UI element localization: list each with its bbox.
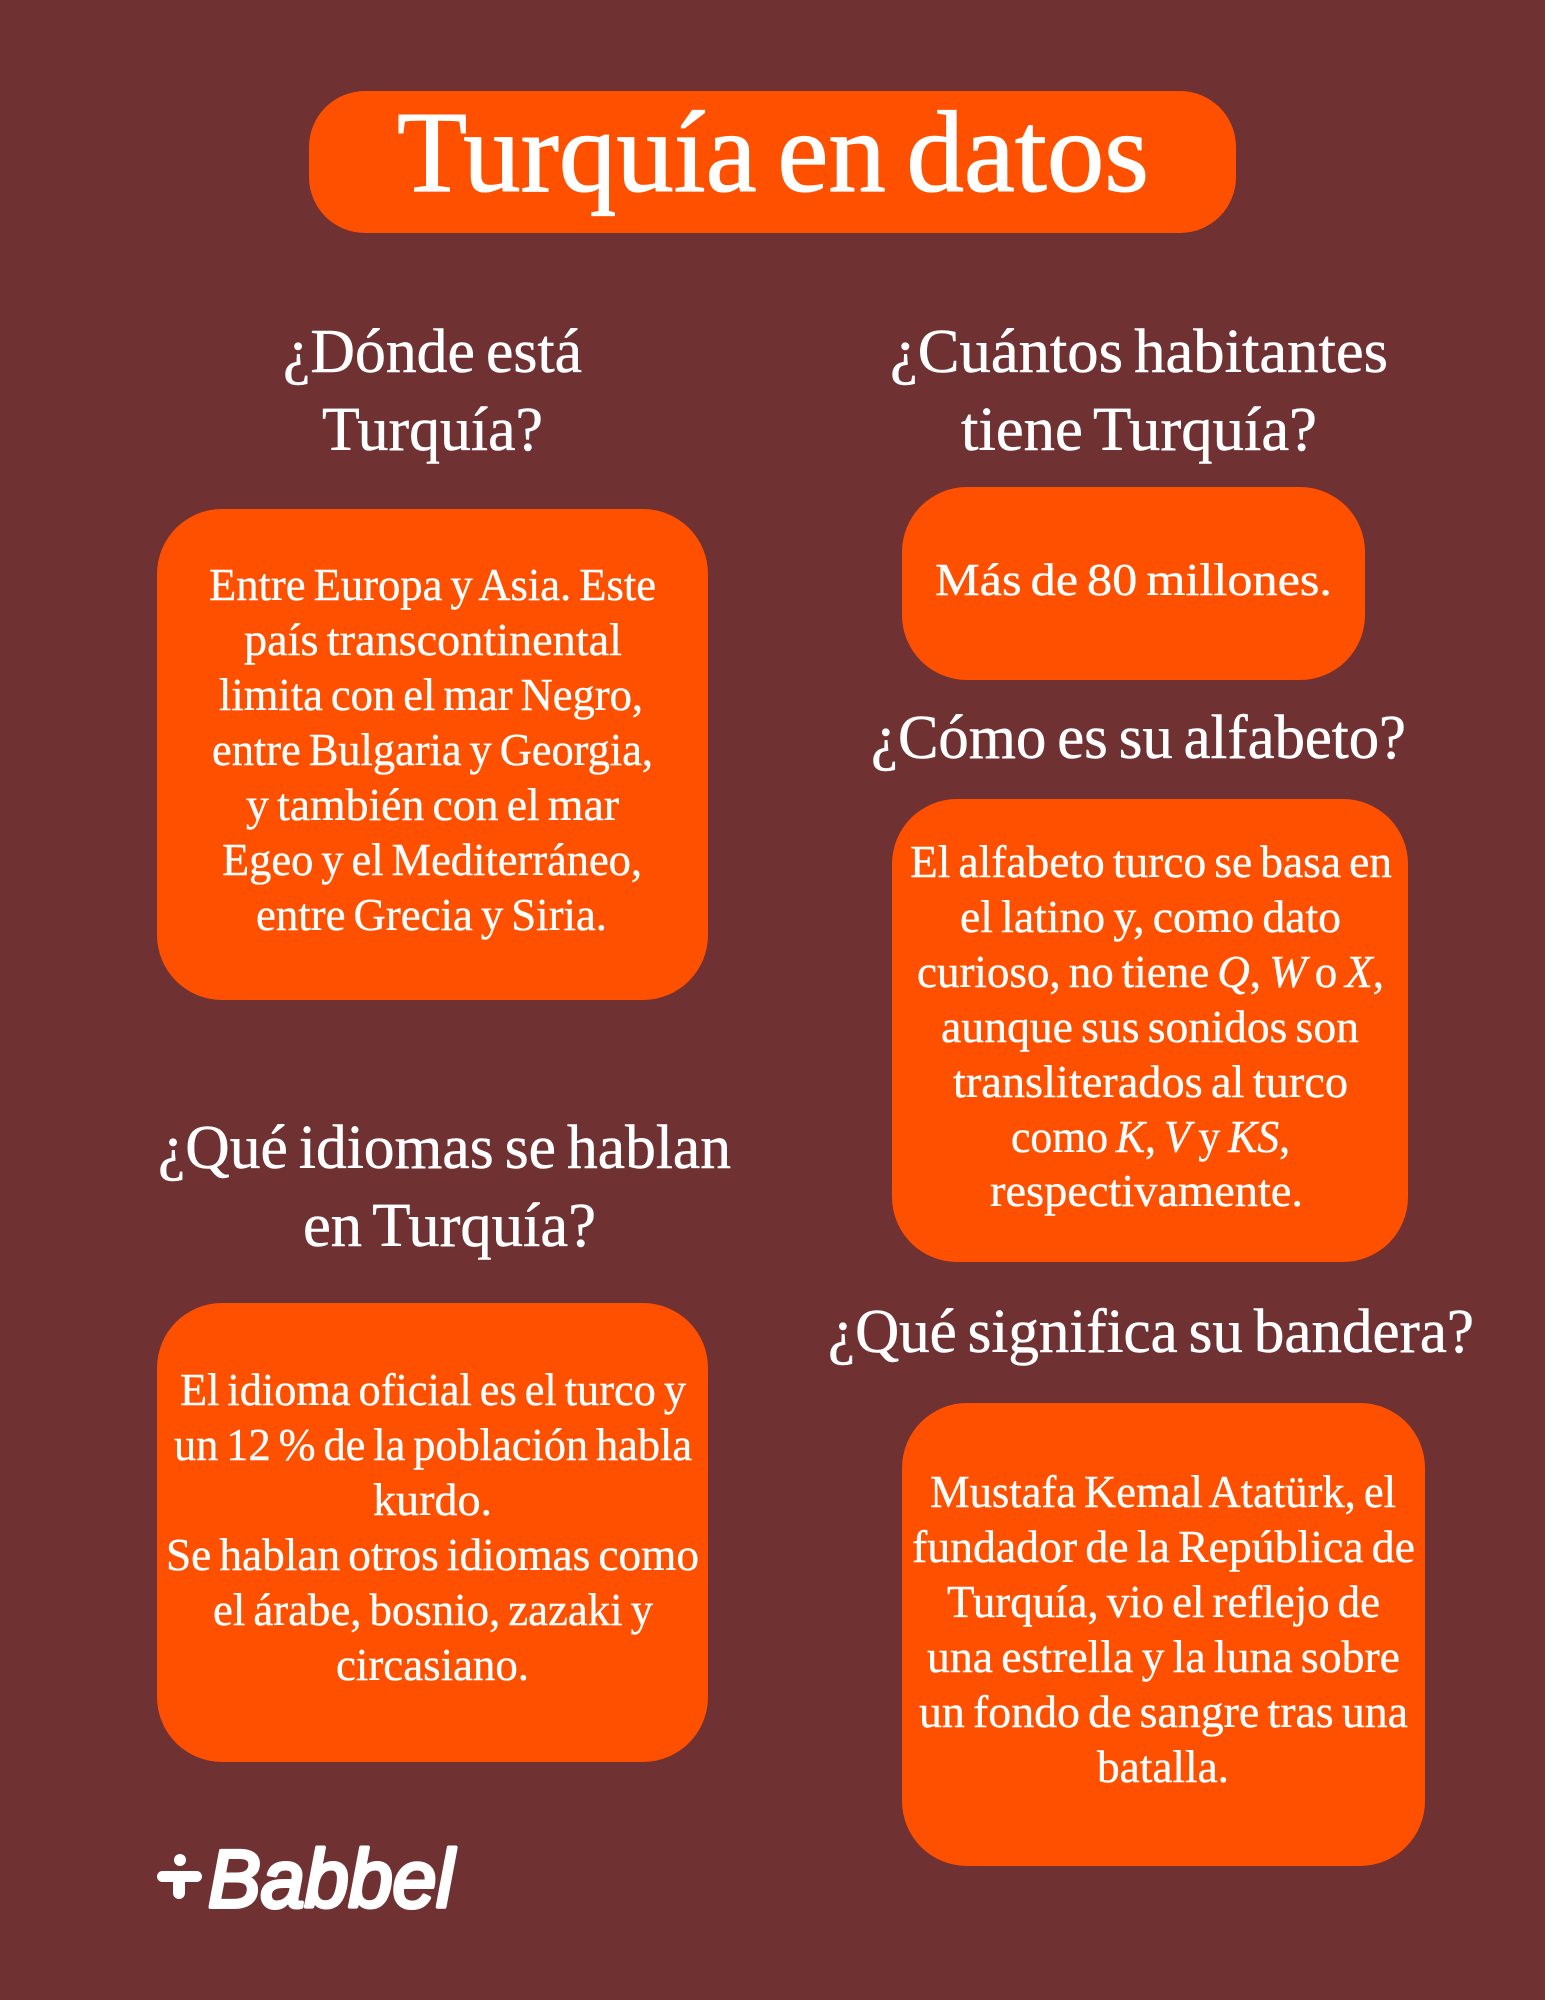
panel: bandera (828, 1298, 1474, 1866)
text block: idiomas: un 12 % de la población habla (174, 1419, 692, 1470)
text block: bandera: Mustafa Kemal Atatürk, el (930, 1466, 1396, 1517)
text block: habitantes (902, 487, 1365, 680)
text block: bandera: Turquía, vio el reflejo de (947, 1576, 1380, 1627)
heading: idiomas (158, 1114, 731, 1260)
panel: habitantes (890, 318, 1388, 680)
logo: Babbel: Babbel (208, 1834, 457, 1925)
heading: idiomas: en Turquía? (303, 1192, 596, 1260)
panel: dónde está (157, 318, 708, 1000)
text block: dónde está: y también con el mar (246, 779, 619, 830)
text block: dónde está: Egeo y el Mediterráneo, (222, 834, 642, 885)
heading: dónde está: Turquía? (322, 396, 543, 464)
heading: dónde está (283, 318, 582, 464)
heading: habitantes: ¿Cuántos habitantes (890, 318, 1388, 386)
text block: bandera: una estrella y la luna sobre (927, 1631, 1400, 1682)
text block: idiomas: circasiano. (336, 1639, 529, 1690)
heading: bandera: ¿Qué significa su bandera? (828, 1298, 1474, 1366)
text block: alfabeto: como K, V y KS, (1011, 1111, 1290, 1162)
text block: alfabeto (892, 799, 1408, 1262)
text block: dónde está: limita con el mar Negro, (219, 669, 643, 720)
text block: bandera: un fondo de sangre tras una (919, 1686, 1408, 1737)
text block: idiomas: El idioma oficial es el turco y (180, 1364, 686, 1415)
panel: alfabeto (871, 704, 1408, 1262)
text block: dónde está: entre Grecia y Siria. (256, 889, 607, 940)
text block: dónde está (157, 509, 708, 1000)
text block: idiomas (157, 1303, 708, 1762)
heading: idiomas: ¿Qué idiomas se hablan (158, 1114, 731, 1182)
text block: bandera: batalla. (1097, 1741, 1229, 1792)
title: Turquía en datos (397, 89, 1149, 217)
text block: dónde está: Entre Europa y Asia. Este (209, 559, 656, 610)
heading: alfabeto: ¿Cómo es su alfabeto? (871, 704, 1406, 772)
text block: alfabeto: El alfabeto turco se basa en (910, 836, 1392, 887)
text block: idiomas: el árabe, bosnio, zazaki y (213, 1584, 653, 1635)
text block: bandera (902, 1403, 1425, 1866)
text block: dónde está: entre Bulgaria y Georgia, (212, 724, 653, 775)
text block: idiomas: kurdo. (373, 1474, 492, 1525)
icon: plus mark (157, 1854, 202, 1899)
text block: idiomas: Se hablan otros idiomas como (166, 1529, 699, 1580)
text block: bandera: fundador de la República de (912, 1521, 1415, 1572)
panel: idiomas (157, 1114, 731, 1762)
text block: habitantes: Más de 80 millones. (935, 554, 1332, 605)
text block: alfabeto: el latino y, como dato (960, 891, 1341, 942)
text block: alfabeto: transliterados al turco (953, 1056, 1348, 1107)
heading: habitantes (890, 318, 1388, 464)
heading: dónde está: ¿Dónde está (283, 318, 582, 386)
text block: alfabeto: respectivamente. (990, 1165, 1303, 1216)
heading: habitantes: tiene Turquía? (961, 396, 1317, 464)
text block: dónde está: país transcontinental (244, 614, 622, 665)
text block: alfabeto: aunque sus sonidos son (941, 1001, 1359, 1052)
text block: alfabeto: curioso, no tiene Q, W o X, (917, 946, 1384, 997)
